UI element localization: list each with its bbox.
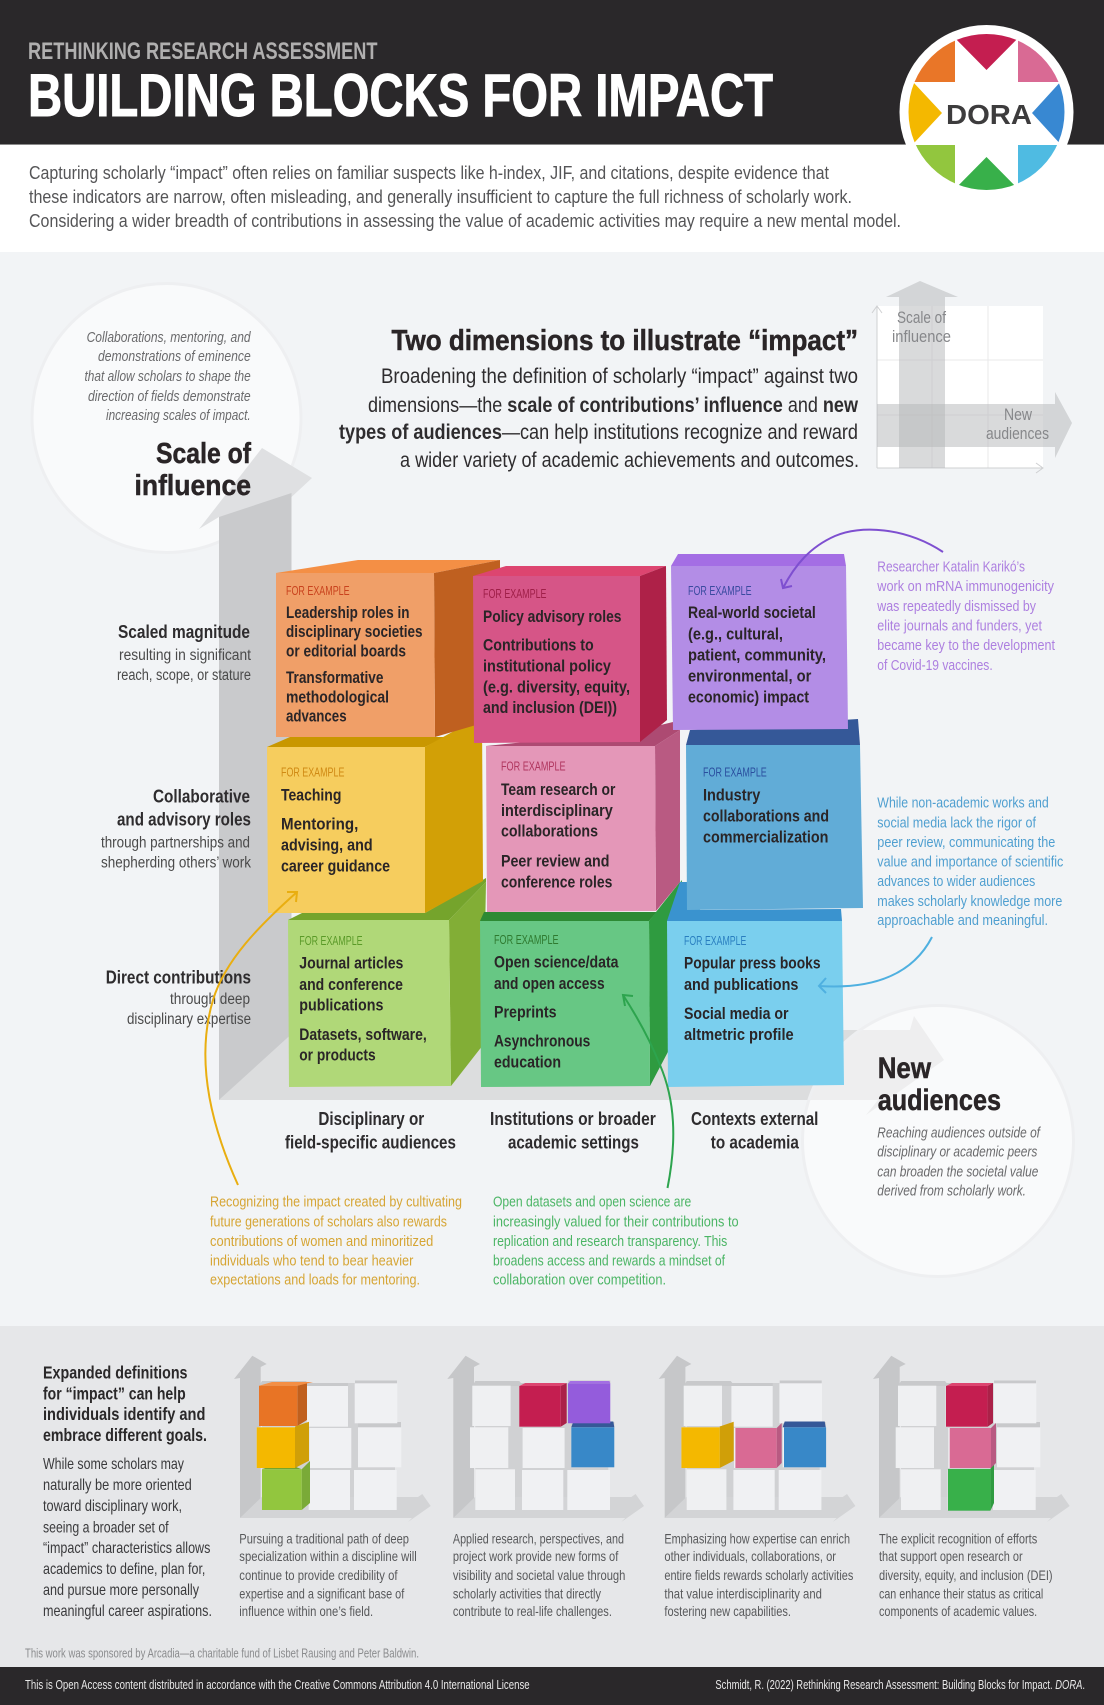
column label: external contexts [691, 1109, 818, 1152]
mini chart 4 caption: components of academic values. [879, 1603, 1037, 1619]
expanded definitions heading: for “impact” can help [43, 1383, 186, 1403]
heading: new audiences: audiences [878, 1084, 1001, 1117]
block: leadership [276, 560, 500, 737]
column label: disciplinary: Disciplinary or [318, 1109, 424, 1129]
column label: external contexts: Contexts external [691, 1109, 818, 1129]
block: leadership: or editorial boards [286, 643, 406, 661]
row label: direct contributions: Direct contributions [106, 967, 251, 987]
footer band [0, 1667, 1104, 1705]
mini axes diagram [872, 281, 1072, 473]
block: teaching: advising, and [281, 837, 373, 855]
callout: Kariko [876, 559, 1056, 674]
block: journal articles [288, 878, 486, 1087]
block: leadership: disciplinary societies [286, 623, 422, 641]
block: popular press: Popular press books [684, 954, 820, 972]
block: team research: Team research or [501, 781, 616, 799]
callout: open science: broadens access and rewards a mindset of [493, 1253, 726, 1270]
new audiences description: derived from scholarly work. [877, 1184, 1026, 1200]
callout: Kariko: Researcher Katalin Karikó’s [877, 559, 1025, 576]
row label: direct contributions [106, 967, 251, 1028]
block: industry: Industry [703, 787, 761, 805]
block: leadership: FOR EXAMPLE [286, 584, 350, 598]
row label: collaborative and advisory roles: Collaborative [153, 787, 250, 807]
header band [0, 0, 1104, 252]
block: team research [486, 722, 680, 912]
expanded definitions body: While some scholars may [43, 1456, 184, 1473]
row label: collaborative and advisory roles: through partnerships and [101, 834, 250, 851]
callout: non-academic works: While non-academic works and [877, 795, 1049, 812]
block: real-world societal [671, 554, 848, 730]
floor and new audiences arrow [219, 1016, 944, 1115]
mini axes diagram: audiences [986, 424, 1049, 443]
block: real-world societal: Real-world societal [688, 604, 816, 622]
block: teaching [267, 720, 483, 913]
intro paragraph [29, 163, 901, 231]
block: policy advisory: Policy advisory roles [483, 608, 622, 626]
callout: open science: replication and research transparency. This [493, 1233, 727, 1250]
heading: scale of influence: Scale of [156, 438, 251, 470]
row label: collaborative and advisory roles: shepherding others’ work [101, 854, 251, 871]
column label: institutions [490, 1109, 656, 1152]
row label: scaled magnitude: Scaled magnitude [118, 622, 250, 642]
scale of influence description [84, 330, 251, 424]
mini chart 1 caption: specialization within a discipline will [239, 1548, 417, 1564]
mini chart 3 caption: fostering new capabilities. [664, 1603, 791, 1619]
mini chart 2: applied research [447, 1356, 644, 1522]
block: teaching: Mentoring, [281, 815, 358, 833]
arrow: yellow callout [205, 892, 297, 1185]
callout: Kariko: elite journals and funders, yet [877, 618, 1043, 635]
block: journal articles: publications [299, 997, 383, 1015]
column label: disciplinary: field-specific audiences [285, 1132, 456, 1152]
block: teaching: FOR EXAMPLE [281, 766, 344, 780]
callout: open science [493, 1194, 739, 1288]
mini chart 1 caption: expertise and a significant base of [239, 1585, 404, 1601]
block: open science [480, 880, 682, 1087]
callout: mentoring: contributions of women and minoritized [210, 1233, 433, 1250]
intro paragraph: Capturing scholarly “impact” often relies on familiar suspects like h-index, JIF, and citations, despite evidence that [29, 163, 829, 183]
block: popular press: Social media or [684, 1005, 789, 1023]
block: industry: FOR EXAMPLE [703, 766, 767, 780]
row label: collaborative and advisory roles [101, 787, 251, 871]
block: industry: collaborations and [703, 808, 829, 826]
mini chart 1 caption: influence within one’s field. [239, 1603, 373, 1619]
callout: mentoring: individuals who tend to bear heavier [210, 1253, 413, 1270]
mini chart 4: open research and DEI [873, 1356, 1070, 1522]
mini chart 3 caption: other individuals, collaborations, or [664, 1548, 836, 1564]
block: real-world societal: economic) impact [688, 689, 809, 707]
mini chart 4 caption [879, 1530, 1053, 1619]
eyebrow title: RETHINKING RESEARCH ASSESSMENT [28, 38, 378, 65]
scale of influence description: Collaborations, mentoring, and [87, 330, 251, 346]
block: real-world societal: (e.g., cultural, [688, 625, 783, 643]
expanded definitions heading: Expanded definitions [43, 1362, 188, 1382]
mini chart 1 caption [239, 1530, 417, 1619]
new audiences description: Reaching audiences outside of [877, 1125, 1042, 1141]
block: leadership: advances [286, 708, 347, 726]
intro paragraph: these indicators are narrow, often misleading, and generally insufficient to capture the full richness of scholarly work. [29, 187, 852, 207]
expanded definitions heading: individuals identify and [43, 1404, 205, 1424]
mini chart 3 caption: Emphasizing how expertise can enrich [664, 1530, 850, 1546]
block: open science: FOR EXAMPLE [494, 933, 559, 947]
two dimensions paragraph: a wider variety of academic achievements and outcomes. [400, 449, 859, 472]
callout: non-academic works: social media lack the rigor of [877, 815, 1037, 832]
mini axes diagram: influence [892, 327, 951, 346]
mini chart 3: interdisciplinary [659, 1356, 855, 1522]
block: policy advisory: Contributions to [483, 637, 594, 655]
expanded definitions body: naturally be more oriented [43, 1477, 192, 1494]
expanded definitions body: seeing a broader set of [43, 1519, 169, 1536]
block: policy advisory: FOR EXAMPLE [483, 587, 546, 601]
callout: mentoring: future generations of scholars also rewards [210, 1214, 447, 1231]
expanded definitions heading: embrace different goals. [43, 1425, 207, 1445]
column label: institutions: Institutions or broader [490, 1109, 656, 1129]
building blocks grid [267, 554, 863, 1087]
column label: disciplinary [285, 1109, 456, 1152]
block: open science: Preprints [494, 1004, 556, 1022]
row label: scaled magnitude: resulting in significant [119, 647, 252, 664]
block: team research: Peer review and [501, 853, 609, 871]
column label: institutions: academic settings [508, 1132, 639, 1152]
mini chart 3 caption: entire fields rewards scholarly activities [664, 1567, 853, 1583]
axis wall [219, 493, 292, 1100]
row label: direct contributions: disciplinary expertise [127, 1011, 251, 1028]
callout: mentoring [210, 1194, 462, 1288]
scale of influence description: increasing scales of impact. [106, 408, 251, 424]
row label: direct contributions: through deep [170, 991, 250, 1008]
block: team research: conference roles [501, 874, 612, 892]
two dimensions paragraph: dimensions—the scale of contributions’ influence and new [368, 394, 859, 417]
callout: open science: collaboration over competition. [493, 1271, 666, 1288]
arrow: blue callout [819, 937, 932, 993]
arrow: purple callout [781, 530, 943, 588]
expanded definitions body [43, 1456, 212, 1620]
heading: new audiences: New [878, 1052, 932, 1085]
mini chart 1: disciplinary path [234, 1356, 431, 1522]
block: journal articles: Datasets, software, [299, 1026, 427, 1044]
mini chart 2 caption [453, 1530, 625, 1619]
block: popular press [667, 882, 844, 1087]
circle: new audiences [802, 1006, 1074, 1276]
callout: open science: Open datasets and open science are [493, 1194, 691, 1211]
block: team research: collaborations [501, 823, 598, 841]
block: journal articles: FOR EXAMPLE [299, 934, 363, 948]
heading: scale of influence [134, 438, 251, 502]
sponsor note: This work was sponsored by Arcadia—a charitable fund of Lisbet Rausing and Peter Baldwin. [25, 1646, 419, 1660]
mini axes diagram: New [1004, 405, 1033, 424]
block: teaching: career guidance [281, 858, 390, 876]
heading: scale of influence: influence [134, 470, 251, 502]
mini chart 3 caption [664, 1530, 853, 1619]
block: policy advisory: and inclusion (DEI)) [483, 699, 617, 717]
callout: Kariko: was repeatedly dismissed by [876, 598, 1036, 615]
block: industry: commercialization [703, 829, 828, 847]
block: popular press: altmetric profile [684, 1026, 794, 1044]
main title: BUILDING BLOCKS FOR IMPACT [28, 62, 773, 129]
expanded definitions body: toward disciplinary work, [43, 1498, 182, 1515]
row label: scaled magnitude: reach, scope, or stature [117, 667, 251, 684]
block: policy advisory: (e.g. diversity, equity, [483, 679, 630, 697]
block: journal articles: or products [299, 1047, 376, 1065]
mini chart 4 caption: that support open research or [879, 1548, 1023, 1564]
new audiences description: disciplinary or academic peers [877, 1145, 1037, 1161]
new audiences description [877, 1125, 1042, 1200]
icon: DORA logo [900, 25, 1074, 199]
panel: expanded definitions background [0, 1326, 1104, 1667]
block: leadership: Transformative [286, 669, 383, 687]
mini axes diagram: Scale of [897, 308, 946, 327]
block: real-world societal: patient, community, [688, 647, 826, 665]
row label: collaborative and advisory roles: and advisory roles [117, 810, 251, 830]
heading: two dimensions: Two dimensions to illustrate “impact” [392, 325, 858, 357]
mini chart 3 caption: that value interdisciplinarity and [664, 1585, 822, 1601]
callout: non-academic works: approachable and meaningful. [877, 912, 1048, 929]
circle: scale of influence [32, 284, 301, 552]
two dimensions paragraph: types of audiences—can help institutions recognize and reward [339, 421, 858, 444]
arrow: green callout [623, 995, 673, 1188]
block: open science: education [494, 1054, 561, 1072]
block: team research: FOR EXAMPLE [501, 760, 566, 774]
expanded definitions heading [43, 1362, 207, 1445]
block: real-world societal: environmental, or [688, 668, 812, 686]
expanded definitions body: meaningful career aspirations. [43, 1603, 212, 1620]
callout: non-academic works: value and importance of scientific [877, 854, 1064, 871]
mini chart 1 caption: Pursuing a traditional path of deep [239, 1530, 409, 1546]
block: popular press: and publications [684, 976, 798, 994]
block: open science: and open access [494, 975, 605, 993]
expanded definitions body: and pursue more personally [43, 1582, 199, 1599]
block: journal articles: and conference [299, 976, 403, 994]
column label: external contexts: to academia [711, 1132, 800, 1152]
mini chart 4 caption: diversity, equity, and inclusion (DEI) [879, 1567, 1053, 1583]
mini chart 1 caption: continue to provide credibility of [239, 1567, 398, 1583]
callout: Kariko: work on mRNA immunogenicity [876, 578, 1054, 595]
callout: non-academic works: peer review, communicating the [877, 834, 1055, 851]
callout: non-academic works [877, 795, 1064, 929]
callout: Kariko: became key to the development [877, 637, 1056, 654]
heading: new audiences [878, 1052, 1001, 1117]
block: open science: Asynchronous [494, 1033, 590, 1051]
footer band: This is Open Access content distributed in accordance with the Creative Commons Attribution 4.0 International License [25, 1677, 530, 1692]
icon: DORA logo: DORA [946, 99, 1032, 130]
block: open science: Open science/data [494, 954, 619, 972]
callout: mentoring: Recognizing the impact created by cultivating [210, 1194, 462, 1211]
block: team research: interdisciplinary [501, 802, 614, 820]
two dimensions paragraph: Broadening the definition of scholarly “impact” against two [381, 365, 858, 388]
expanded definitions body: academics to define, plan for, [43, 1561, 205, 1578]
mini chart 4 caption: The explicit recognition of efforts [879, 1530, 1037, 1546]
block: policy advisory [473, 566, 667, 743]
callout: mentoring: expectations and loads for mentoring. [210, 1271, 420, 1288]
block: teaching: Teaching [281, 787, 341, 805]
two dimensions paragraph [339, 365, 859, 472]
scale of influence description: that allow scholars to shape the [84, 369, 251, 385]
mini chart 4 caption: can enhance their status as critical [879, 1585, 1043, 1601]
mini chart 2 caption: visibility and societal value through [453, 1567, 625, 1583]
scale of influence arrowhead [199, 448, 312, 540]
block: leadership: methodological [286, 689, 389, 707]
mini chart 2 caption: Applied research, perspectives, and [453, 1530, 624, 1546]
callout: Kariko: of Covid-19 vaccines. [877, 657, 993, 674]
expanded definitions body: “impact” characteristics allows [43, 1540, 210, 1557]
mini chart 2 caption: contribute to real-life challenges. [453, 1603, 612, 1619]
block: real-world societal: FOR EXAMPLE [688, 584, 752, 598]
callout: open science: increasingly valued for their contributions to [493, 1214, 739, 1231]
callout: non-academic works: advances to wider audiences [877, 873, 1035, 890]
block: journal articles: Journal articles [299, 954, 403, 972]
intro paragraph: Considering a wider breadth of contributions in assessing the value of academic activities may require a new mental model. [29, 211, 901, 231]
block: leadership: Leadership roles in [286, 604, 410, 622]
new audiences description: can broaden the societal value [877, 1165, 1038, 1181]
row label: scaled magnitude [117, 622, 252, 684]
scale of influence description: direction of fields demonstrate [88, 389, 251, 405]
block: industry [686, 719, 863, 910]
block: policy advisory: institutional policy [483, 658, 612, 676]
mini chart 2 caption: scholarly activities that directly [453, 1585, 601, 1601]
block: popular press: FOR EXAMPLE [684, 934, 746, 948]
mini chart 2 caption: project work provide new forms of [453, 1548, 618, 1564]
scale of influence description: demonstrations of eminence [98, 349, 251, 365]
callout: non-academic works: makes scholarly knowledge more [877, 893, 1062, 910]
